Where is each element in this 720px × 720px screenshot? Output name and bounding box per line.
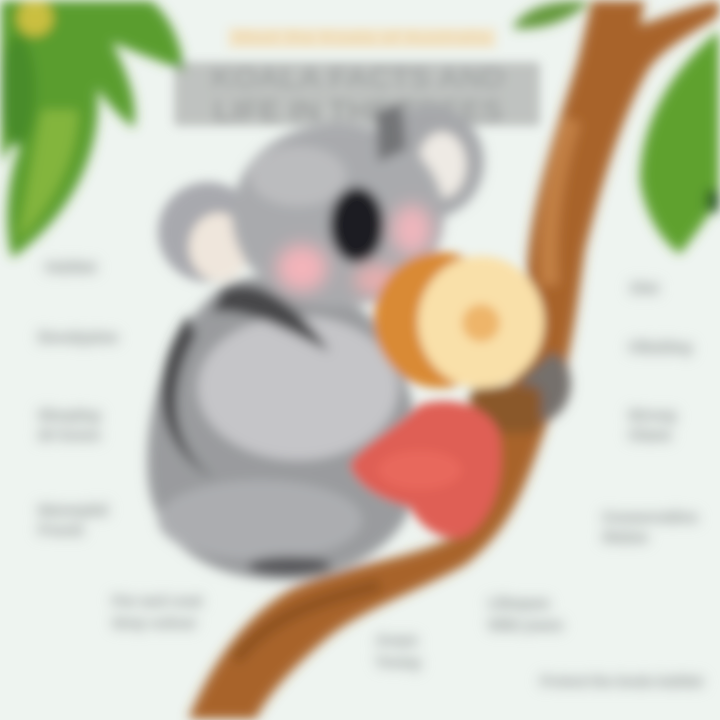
cut fruit bbox=[374, 252, 544, 388]
label: right 3: Strong bbox=[628, 407, 676, 424]
label: left 4 bbox=[38, 502, 108, 539]
dark paw on branch bbox=[470, 352, 571, 433]
label: bottom 4: Protect the koala habitat bbox=[540, 673, 703, 689]
left labels bbox=[38, 259, 118, 539]
leaves: top right bbox=[512, 0, 720, 254]
label: left 4: Pouch bbox=[38, 522, 84, 539]
label: right 3: Claws bbox=[628, 427, 671, 444]
label: left 2: Eucalyptus bbox=[38, 329, 118, 346]
label: bottom 1: Fur and coat bbox=[112, 593, 202, 610]
red leaf bbox=[350, 401, 501, 538]
label: left 3: Sleeping bbox=[38, 407, 101, 424]
label: bottom 3: Wild years bbox=[488, 617, 563, 634]
label: bottom 1 bbox=[112, 593, 202, 632]
label: left 4: Marsupial bbox=[38, 502, 108, 519]
label: bottom 2: Young bbox=[375, 654, 421, 671]
title bbox=[174, 60, 540, 128]
label: bottom 1: Grey colour bbox=[112, 615, 196, 632]
subtitle band: Meet the Koala of Australia bbox=[234, 27, 491, 49]
title: KOALA FACTS AND bbox=[211, 60, 505, 95]
right labels bbox=[602, 280, 698, 546]
label: right 4: Conservation bbox=[602, 509, 698, 526]
label: right 3 bbox=[628, 407, 676, 444]
cheeks bbox=[277, 205, 432, 295]
left ear bbox=[158, 182, 258, 282]
label: right 4: Status bbox=[602, 529, 648, 546]
label: left 3 bbox=[38, 407, 101, 444]
body bbox=[147, 276, 418, 580]
branch bbox=[188, 0, 720, 720]
koala bbox=[147, 102, 484, 580]
head bbox=[232, 102, 444, 307]
label: left 3: 20 hours bbox=[38, 427, 101, 444]
right ear bbox=[376, 106, 484, 218]
label: bottom 3: Lifespan bbox=[488, 595, 550, 612]
leaves: top left bbox=[0, 0, 184, 258]
bottom labels bbox=[112, 593, 703, 689]
title: LIFE IN THE TREES bbox=[213, 93, 503, 128]
eye / nose bbox=[331, 188, 383, 262]
label: bottom 2 bbox=[375, 632, 421, 671]
label: right 2: Climbing bbox=[628, 339, 692, 356]
label: bottom 2: Joeys bbox=[375, 632, 418, 649]
label: right 1: Diet bbox=[630, 280, 658, 297]
label: bottom 3 bbox=[488, 595, 563, 634]
label: left 1: Habitat bbox=[45, 259, 96, 276]
label: right 4 bbox=[602, 509, 698, 546]
